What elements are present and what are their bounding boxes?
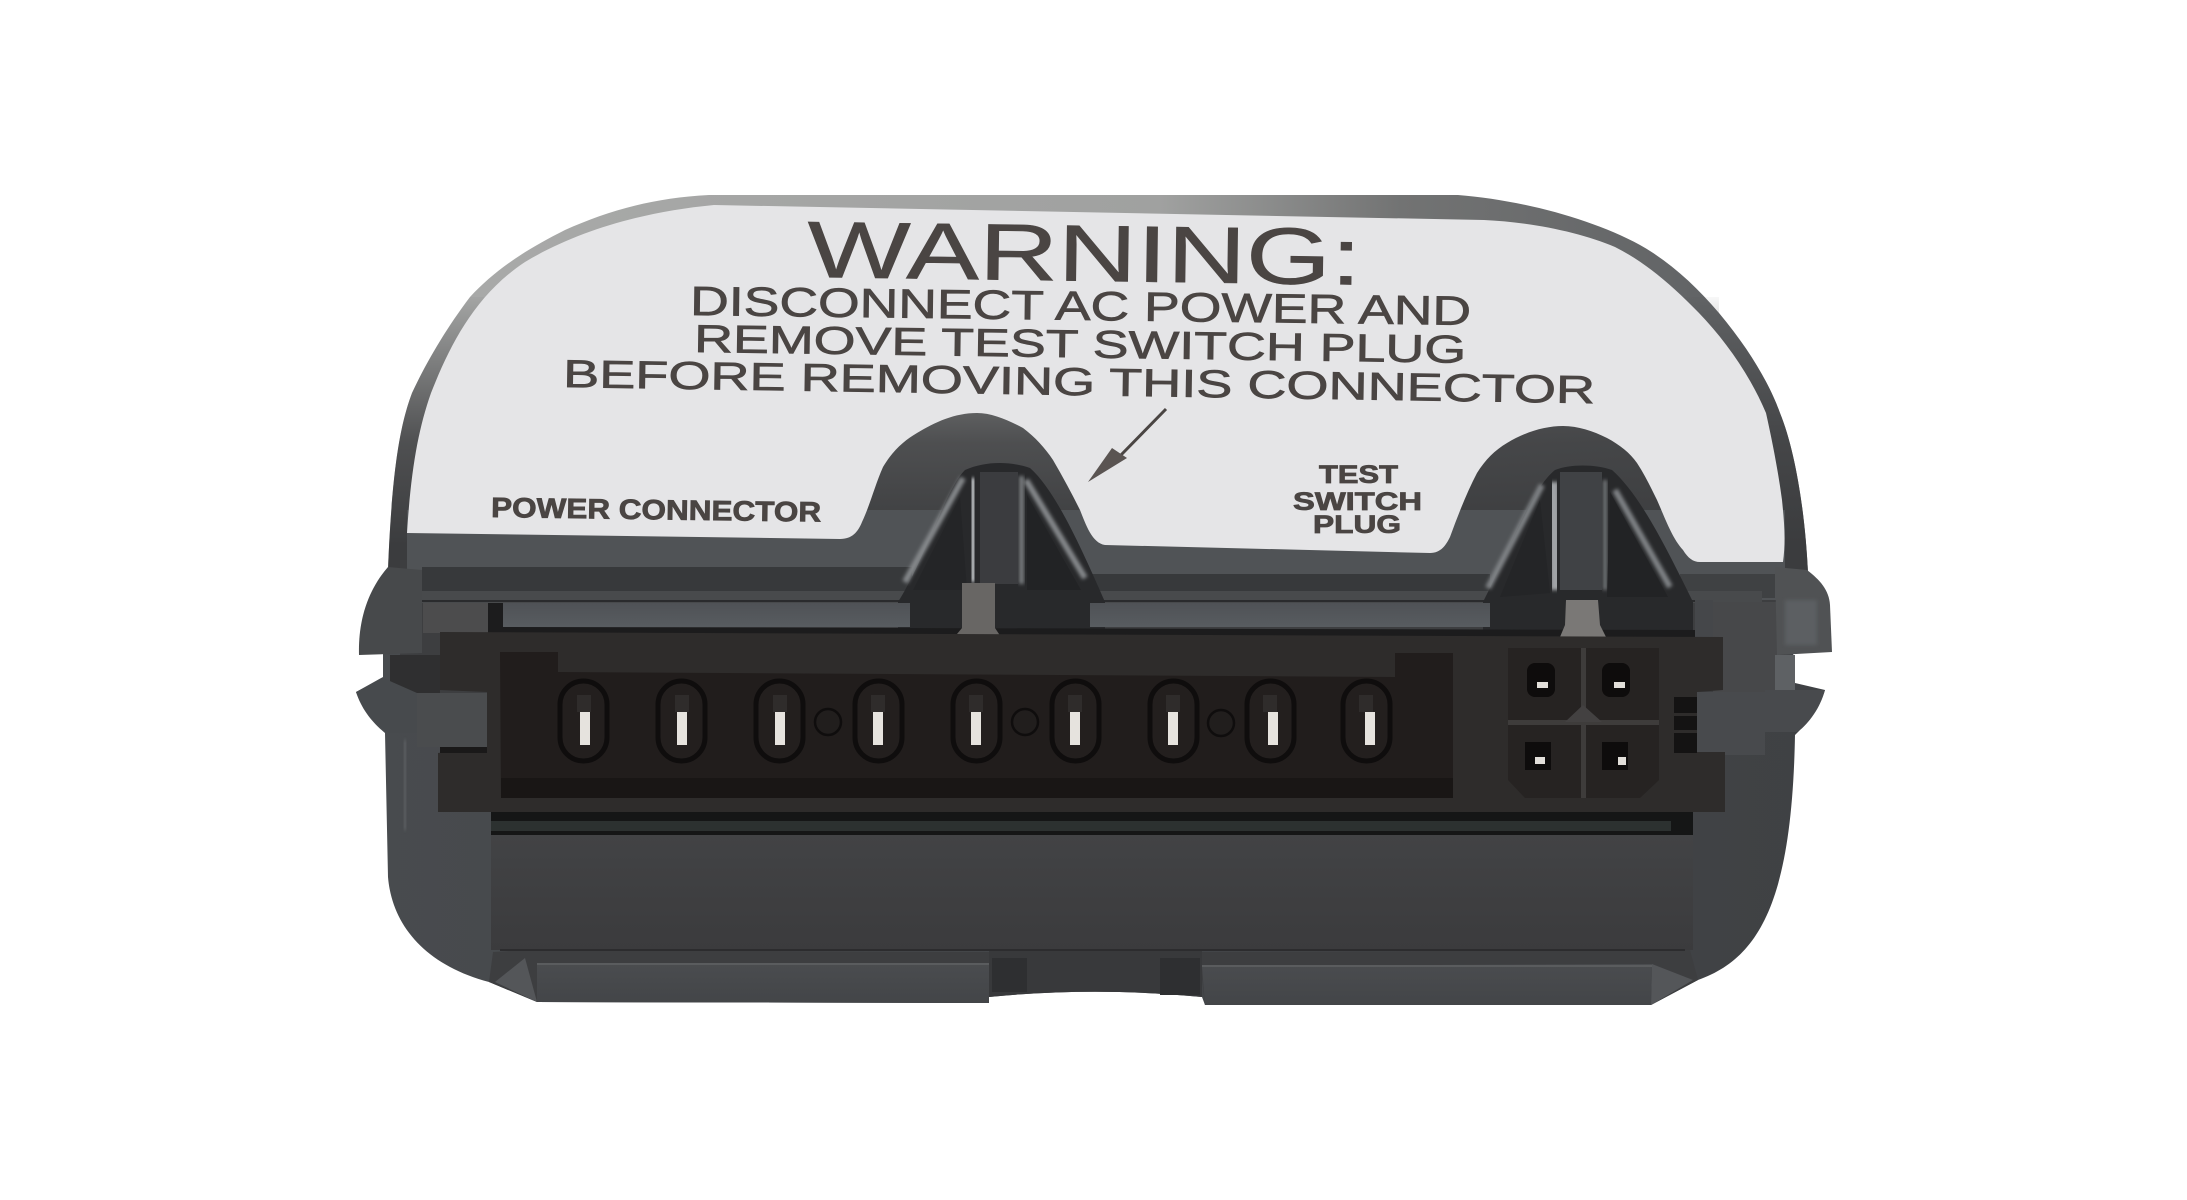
right side ear (1697, 567, 1832, 755)
dark housing under label (407, 510, 1785, 600)
label: test switch plug (1293, 461, 1422, 539)
bottom foot right (1199, 950, 1698, 1005)
connector frame (438, 632, 1725, 812)
bottom foot left (489, 950, 989, 1003)
right post block (1695, 600, 1713, 637)
side vent slots (1674, 697, 1697, 753)
shelf shadow (487, 627, 1697, 640)
polarising triangle (1565, 705, 1602, 722)
main pin recess (500, 652, 1453, 798)
housing: lower body silhouette (356, 650, 1825, 1005)
dark channel below connector (491, 812, 1693, 835)
rim lower shading (388, 297, 1808, 573)
heading: WARNING: WARNING: (807, 205, 1362, 302)
label: test switch plug: PLUG (1313, 511, 1401, 539)
left body highlight (404, 740, 406, 830)
recess lower shadow (501, 778, 1453, 798)
lower panel bottom seam (500, 949, 1685, 951)
left post (952, 583, 1003, 640)
warning line 3: BEFORE REMOVING THIS CONNECTOR (563, 353, 1595, 412)
center recess between feet (989, 950, 1202, 997)
label: test switch plug: SWITCH (1293, 488, 1422, 516)
left grey clip (417, 693, 487, 747)
lower front panel (491, 835, 1693, 950)
left notch block (390, 655, 440, 693)
grey block left (423, 603, 488, 633)
clip shadow (440, 747, 487, 753)
dark bands across housing (422, 567, 1775, 603)
shelf panel left (503, 603, 910, 627)
lower left wedge (356, 678, 417, 733)
warning line 2: REMOVE TEST SWITCH PLUG (694, 318, 1466, 372)
warning label sticker (407, 205, 1785, 562)
right post (1560, 600, 1606, 637)
label: test switch plug: TEST (1319, 461, 1398, 489)
upper housing rim (388, 195, 1808, 573)
base fill behind ears and shelf (400, 560, 1785, 700)
label: power connector: POWER CONNECTOR (491, 492, 821, 528)
right opening (1483, 466, 1693, 632)
pin sockets row (560, 681, 1390, 761)
test switch plug socket (1508, 648, 1659, 798)
left side ear (356, 567, 440, 733)
left opening (898, 463, 1105, 632)
shelf panel right (1090, 603, 1490, 627)
arrow pointing to connector (1088, 409, 1166, 482)
warning line 1: DISCONNECT AC POWER AND (690, 278, 1471, 334)
lower right wedge (1765, 690, 1825, 732)
right upper block (1713, 602, 1777, 692)
small black gap left (488, 603, 503, 633)
